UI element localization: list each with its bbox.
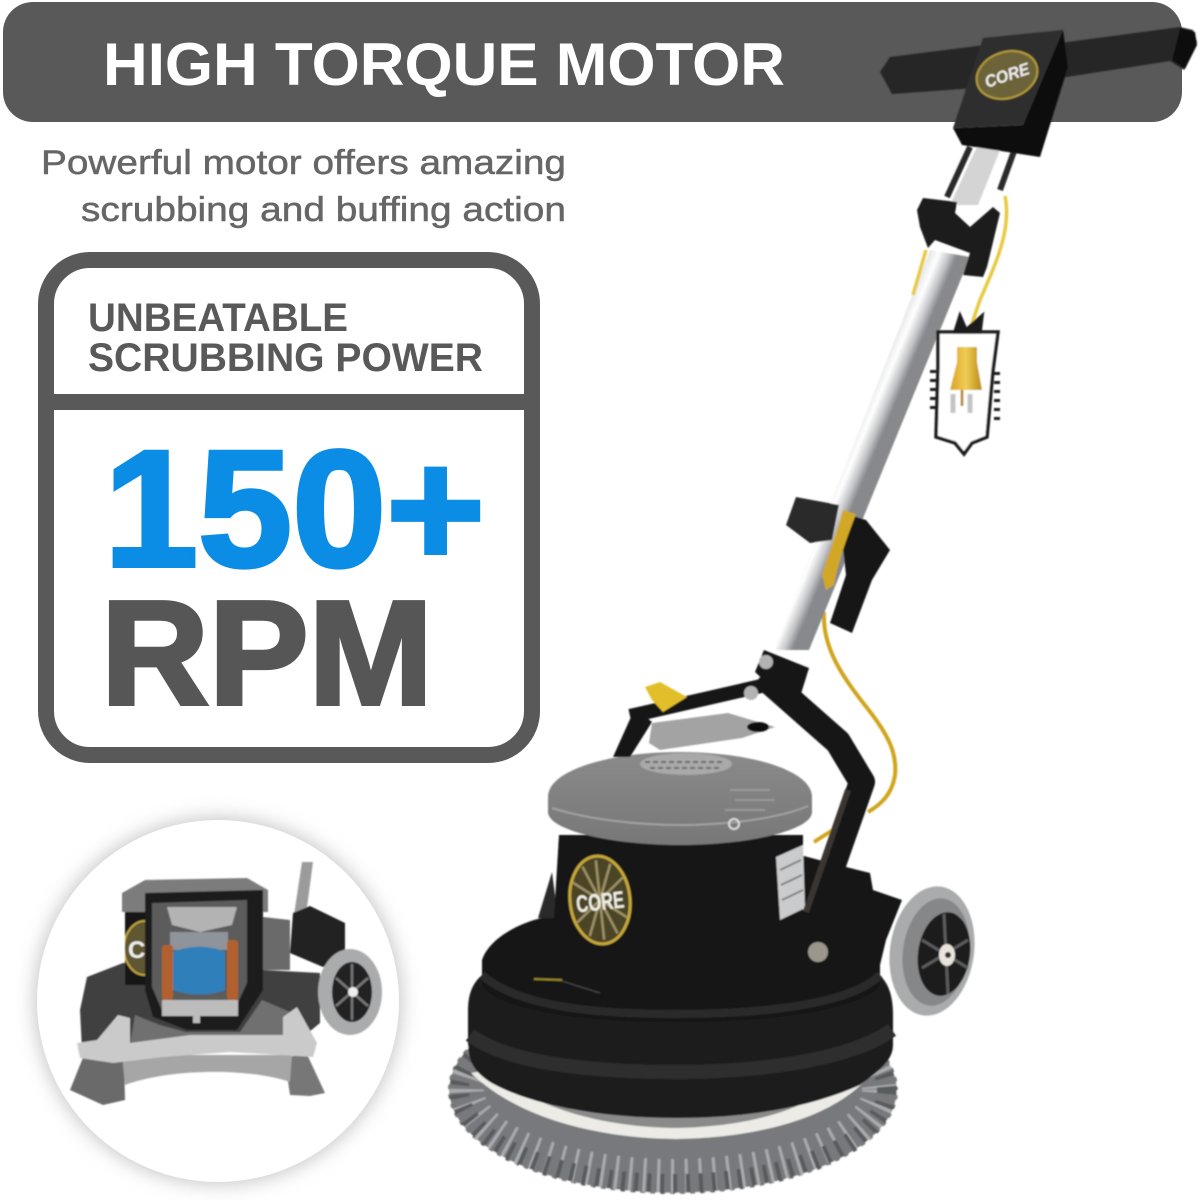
panel heading: UNBEATABLE <box>88 296 348 340</box>
pole stub <box>294 862 313 915</box>
yoke foot bracket <box>775 920 839 982</box>
lid <box>122 878 268 912</box>
motor serial label <box>776 845 805 920</box>
yellow cord, upper run <box>913 196 1007 350</box>
motor lid <box>548 752 812 845</box>
white scrub ring <box>471 1070 866 1139</box>
yellow clamp latch <box>822 510 856 590</box>
title: HIGH TORQUE MOTOR <box>103 31 785 98</box>
handle CORE logo: CORE <box>982 59 1033 92</box>
T handle <box>880 27 1197 157</box>
brush left <box>70 1055 125 1105</box>
light gray scrub plate <box>77 1007 317 1063</box>
panel heading: SCRUBBING POWER <box>88 336 483 380</box>
core logo partial: COI <box>128 937 171 964</box>
lower clamp right block <box>830 515 890 633</box>
upper clamp <box>917 198 1000 277</box>
description text <box>41 144 566 229</box>
motor body <box>552 835 803 980</box>
brush right <box>285 1050 325 1096</box>
yoke bolts <box>744 655 773 700</box>
right wheel <box>881 881 983 1021</box>
brush arc <box>122 1055 292 1085</box>
yellow plug <box>950 347 982 413</box>
stat unit: RPM: RPM <box>101 571 433 736</box>
handle guide rods <box>947 143 1017 197</box>
lower pole <box>773 250 970 650</box>
callout circle: motor cutaway <box>34 817 402 1185</box>
panel: scrubbing power stat <box>46 260 532 755</box>
upper tube <box>950 140 1004 205</box>
base housing upper layer <box>482 915 880 1022</box>
left motor bracket <box>538 872 558 918</box>
description text: scrubbing and buffing action <box>81 191 566 229</box>
cutaway frame <box>145 890 263 1030</box>
rear wheel housing <box>800 855 902 965</box>
yoke arm <box>613 675 862 930</box>
motor CORE logo <box>566 853 634 947</box>
yellow adjustment knob <box>645 682 687 712</box>
yoke arm underside <box>649 713 775 750</box>
base housing <box>80 963 320 1050</box>
copper coils <box>162 940 238 1000</box>
header banner <box>3 2 1182 122</box>
gray box <box>263 917 290 970</box>
small gold base lettering <box>534 979 562 980</box>
handle plate <box>953 30 1063 128</box>
lower bearing and shaft <box>162 1000 238 1023</box>
black rear block <box>290 906 345 967</box>
blue rotor <box>173 947 225 994</box>
pole collar <box>755 650 809 700</box>
motor CORE logo: CORE <box>575 887 626 918</box>
lower clamp left block <box>786 497 839 543</box>
yellow power cord, lower run <box>814 612 895 842</box>
base housing lower layer <box>468 970 893 1118</box>
stat value: 150+: 150+ <box>104 417 485 602</box>
wheel <box>318 949 382 1035</box>
brush <box>448 986 898 1194</box>
core logo partial <box>124 911 146 986</box>
panel heading <box>88 296 483 380</box>
cutaway interior <box>152 900 247 1013</box>
icon: floor machine product photo <box>448 27 1197 1194</box>
cutaway illustration <box>70 862 382 1105</box>
handle CORE logo <box>970 44 1044 106</box>
base center <box>130 1000 300 1045</box>
fan <box>167 907 237 932</box>
description text: Powerful motor offers amazing <box>41 144 566 182</box>
cord wrap bracket <box>933 316 998 454</box>
handle block side <box>953 30 1068 157</box>
motor top windings <box>170 932 228 950</box>
